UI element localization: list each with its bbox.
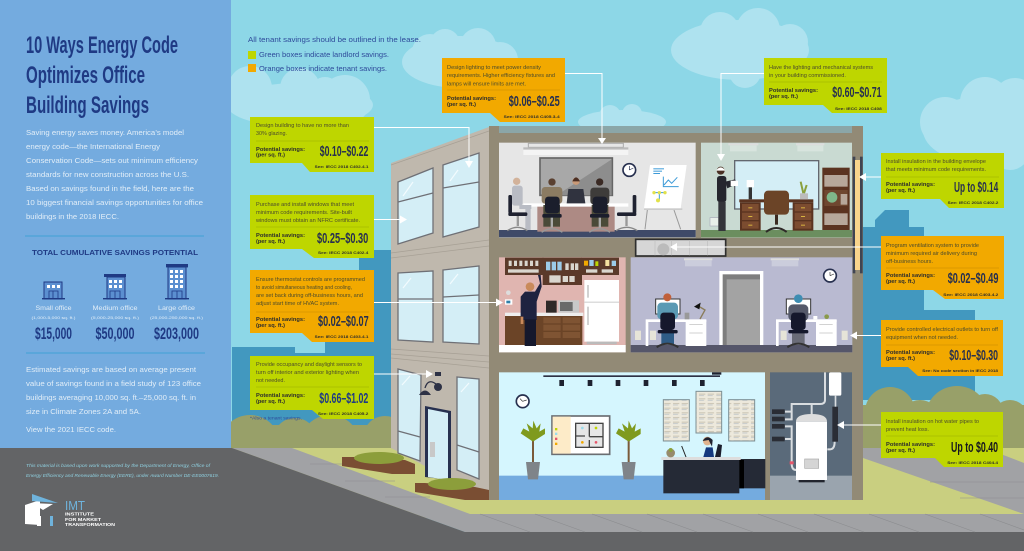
room: lobby bbox=[499, 372, 765, 500]
callout: insulation envelope bbox=[881, 153, 1004, 208]
intro text: 10 biggest financial savings opportunities for office bbox=[26, 198, 203, 207]
callout: glazing: Potential savings: bbox=[256, 147, 305, 153]
room: conference bbox=[499, 143, 696, 238]
room: kitchen bbox=[499, 257, 626, 352]
funding disclaimer: Energy Efficiency and Renewable Energy (EERE), under Award Number DE-EE0007619. bbox=[26, 473, 219, 478]
intro text: energy code—the International Energy bbox=[26, 142, 160, 151]
callout: occupancy sensors bbox=[250, 356, 374, 419]
callout: glazing: Design building to have no more than bbox=[256, 123, 349, 129]
callout: thermostat controls: See: IECC 2018 C403.4.1 bbox=[315, 334, 369, 339]
estimate note bbox=[26, 365, 201, 434]
callout: controlled outlets: Provide controlled electrical outlets to turn off bbox=[886, 327, 998, 333]
large office savings: (25,000-250,000 sq. ft.) bbox=[150, 315, 204, 320]
callout: controlled outlets: equipment when not needed. bbox=[886, 335, 958, 341]
room: mechanical bbox=[770, 372, 852, 500]
medium office savings: $50,000 bbox=[96, 324, 134, 343]
intro text: Saving energy saves money. America’s model bbox=[26, 128, 184, 137]
ventilation duct bbox=[636, 239, 726, 256]
heading: total savings: TOTAL CUMULATIVE SAVINGS POTENTIAL bbox=[32, 248, 199, 257]
ground, sidewalk and road bbox=[232, 448, 1024, 551]
large office savings: $203,000 bbox=[154, 324, 199, 343]
callout: lighting power density: lamps will ensure limits are met. bbox=[447, 82, 526, 88]
callout: lighting power density: (per sq. ft.) bbox=[447, 102, 476, 108]
legend: All tenant savings should be outlined in the lease. bbox=[248, 35, 421, 44]
callout: thermostat controls: $0.02–$0.07 bbox=[318, 313, 369, 330]
callout: commissioning: (per sq. ft.) bbox=[769, 94, 798, 100]
intro text: standards for new construction across the U.S. bbox=[26, 170, 189, 179]
callout: ventilation: Potential savings: bbox=[886, 273, 935, 279]
window glints bbox=[402, 170, 469, 422]
callout: lighting power density: Potential savings: bbox=[447, 96, 496, 102]
medium office savings: Medium office bbox=[92, 305, 138, 312]
estimate note: buildings averaging 10,000 sq. ft.–25,000 sq. ft. in bbox=[26, 393, 196, 402]
callout: lighting power density: Design lighting to meet power density bbox=[447, 65, 541, 71]
insulated wall section bbox=[853, 157, 863, 273]
callout: insulation envelope: Potential savings: bbox=[886, 182, 935, 188]
logo: IMT: TRANSFORMATION bbox=[65, 522, 116, 527]
callout: lighting power density: requirements. Higher efficiency fixtures and bbox=[447, 73, 555, 79]
callout: occupancy sensors: See: IECC 2018 C405.2 bbox=[318, 411, 369, 416]
callout: commissioning: Potential savings: bbox=[769, 88, 818, 94]
title: Building Savings bbox=[26, 92, 149, 119]
callout: ventilation: off-business hours. bbox=[886, 259, 933, 265]
icon: large office bbox=[165, 264, 189, 299]
callout: lighting power density: $0.06–$0.25 bbox=[509, 93, 560, 110]
callout: thermostat controls: Potential savings: bbox=[256, 317, 305, 323]
callout: thermostat controls bbox=[250, 270, 374, 342]
callout: insulation envelope: (per sq. ft.) bbox=[886, 188, 915, 194]
directory board bbox=[552, 416, 610, 454]
estimate note: value of savings found in a field study of 123 office bbox=[26, 379, 201, 388]
callout: glazing bbox=[250, 117, 374, 172]
large office savings: Large office bbox=[158, 305, 195, 312]
room: open office bbox=[631, 257, 852, 352]
intro text: Based on savings found in the field, here are the bbox=[26, 184, 194, 193]
person with clipboard bbox=[716, 167, 738, 231]
icon: wall lamp and sensor bbox=[419, 372, 442, 395]
callout: ventilation: See: IECC 2018 C403.4.2 bbox=[943, 292, 999, 297]
person at thermostat bbox=[521, 275, 542, 346]
legend bbox=[248, 35, 421, 73]
building: main structure bbox=[489, 126, 863, 500]
callout: glazing: 30% glazing. bbox=[256, 131, 287, 137]
callout: ventilation bbox=[881, 236, 1004, 299]
callout: controlled outlets: (per sq. ft.) bbox=[886, 356, 915, 362]
estimate note: size in Climate Zones 2A and 5A. bbox=[26, 407, 141, 416]
icon: small office bbox=[42, 282, 65, 299]
water heater bbox=[796, 414, 827, 482]
panel: left sidebar bbox=[0, 0, 232, 551]
callout: hot water pipes: prevent heat loss. bbox=[886, 427, 929, 433]
funding disclaimer bbox=[26, 463, 219, 478]
callout: occupancy sensors: not needed. bbox=[256, 378, 285, 384]
desk worker 1 bbox=[646, 293, 706, 347]
fridge bbox=[584, 280, 619, 344]
title: Optimizes Office bbox=[26, 62, 145, 89]
callout: windows: Purchase and install windows that meet bbox=[256, 202, 354, 208]
medium office savings: (5,000-25,000 sq. ft.) bbox=[91, 315, 140, 320]
callout: commissioning: in your building commissioned. bbox=[769, 73, 846, 79]
potted plants bbox=[521, 421, 641, 479]
title bbox=[26, 32, 178, 119]
callout: lighting power density bbox=[442, 58, 565, 122]
logo: IMT bbox=[25, 494, 116, 527]
bookcase bbox=[822, 168, 850, 230]
callout: windows bbox=[250, 195, 374, 258]
rooms on upper floors bbox=[499, 143, 863, 352]
wall frames bbox=[663, 391, 755, 441]
small office savings: $15,000 bbox=[35, 324, 72, 343]
clouds bbox=[227, 8, 1024, 170]
reception desk bbox=[661, 437, 765, 493]
city skyline bbox=[232, 210, 975, 428]
callout: windows: See: IECC 2018 C402.4 bbox=[318, 250, 369, 255]
callout: glazing: (per sq. ft.) bbox=[256, 152, 285, 158]
callout: glazing: See: IECC 2018 C402.4.1 bbox=[315, 164, 369, 169]
footnote: tenant savings: *Also a tenant savings. bbox=[250, 416, 302, 420]
callout: controlled outlets: See: No code section in IECC 2018 bbox=[922, 368, 999, 373]
callout: hot water pipes: (per sq. ft.) bbox=[886, 448, 915, 454]
legend: Orange boxes indicate tenant savings. bbox=[259, 64, 387, 73]
intro text bbox=[26, 128, 203, 221]
logo: IMT: INSTITUTE bbox=[65, 512, 94, 516]
callout: commissioning bbox=[764, 58, 887, 113]
callout: insulation envelope: that meets minimum code requirements. bbox=[886, 167, 986, 173]
small office savings bbox=[32, 305, 76, 343]
callout: windows: minimum code requirements. Site-built bbox=[256, 210, 352, 216]
callout: thermostat controls: to avoid simultaneous heating and cooling, bbox=[256, 285, 352, 291]
desk worker 2 bbox=[776, 294, 837, 347]
callout: thermostat controls: (per sq. ft.) bbox=[256, 323, 285, 329]
callout: occupancy sensors: $0.66–$1.02 bbox=[319, 390, 368, 407]
callout: occupancy sensors: Provide occupancy and daylight sensors to bbox=[256, 362, 362, 368]
room: private office bbox=[701, 143, 852, 238]
callout: ventilation: (per sq. ft.) bbox=[886, 279, 915, 285]
callout: controlled outlets bbox=[881, 320, 1003, 376]
callout: thermostat controls: are set back during off-business hours, and bbox=[256, 293, 363, 299]
callout: ventilation: minimum required air delivery during bbox=[886, 251, 977, 257]
estimate note: Estimated savings are based on average present bbox=[26, 365, 196, 374]
small office savings: (1,000-5,000 sq. ft.) bbox=[32, 315, 76, 320]
callout: ventilation: Program ventilation system to provide bbox=[886, 243, 979, 249]
callout: hot water pipes: See: IECC 2018 C404.4 bbox=[947, 460, 999, 465]
callout: insulation envelope: See: IECC 2018 C402.2 bbox=[948, 200, 999, 205]
desk bbox=[739, 180, 813, 232]
callout: commissioning: Have the lighting and mechanical systems bbox=[769, 65, 873, 71]
planters bbox=[342, 452, 489, 500]
people at table bbox=[507, 177, 637, 232]
callout: insulation envelope: Install insulation in the building envelope bbox=[886, 159, 986, 165]
callout: thermostat controls: Ensure thermostat controls are programmed bbox=[256, 277, 365, 283]
callout arrows bbox=[370, 74, 881, 429]
callout: windows: windows must obtain an NFRC certificate. bbox=[255, 218, 360, 224]
callout: controlled outlets: Potential savings: bbox=[886, 350, 935, 356]
title: 10 Ways Energy Code bbox=[26, 32, 178, 59]
callout: hot water pipes: Install insulation on hot water pipes to bbox=[886, 419, 979, 425]
logo: IMT: IMT bbox=[65, 498, 85, 513]
intro text: Conservation Code—sets out minimum efficiency bbox=[26, 156, 198, 165]
callout: windows: (per sq. ft.) bbox=[256, 239, 285, 245]
icon: medium office bbox=[103, 274, 127, 299]
estimate note: View the 2021 IECC code. bbox=[26, 425, 116, 434]
windows bbox=[398, 153, 479, 479]
callout: occupancy sensors: turn off interior and exterior lighting when bbox=[256, 370, 359, 376]
callout: lighting power density: See: IECC 2018 C405.3-4 bbox=[504, 114, 561, 119]
callout: thermostat controls: adjust start time of HVAC system. bbox=[256, 301, 339, 307]
callout: windows: $0.25–$0.30 bbox=[317, 230, 368, 247]
small office savings: Small office bbox=[36, 305, 72, 312]
building: left wing facade bbox=[342, 127, 489, 500]
callout: windows: Potential savings: bbox=[256, 233, 305, 239]
callout: occupancy sensors: (per sq. ft.) bbox=[256, 399, 285, 405]
callout: commissioning: $0.60–$0.71 bbox=[832, 84, 882, 101]
funding disclaimer: This material is based upon work supported by the Department of Energy, Office of bbox=[26, 463, 211, 468]
callout: commissioning: See: IECC 2018 C408 bbox=[835, 106, 883, 111]
intro text: buildings in the 2018 IECC. bbox=[26, 212, 119, 221]
logo: IMT: FOR MARKET bbox=[65, 517, 101, 522]
ground floor rooms bbox=[499, 372, 852, 500]
door bbox=[425, 406, 451, 480]
hills bbox=[220, 386, 1024, 475]
callout: hot water pipes: Potential savings: bbox=[886, 442, 935, 448]
callout: glazing: $0.10–$0.22 bbox=[320, 143, 368, 160]
callout: hot water pipes bbox=[881, 412, 1003, 467]
callout: occupancy sensors: Potential savings: bbox=[256, 393, 305, 399]
legend: Green boxes indicate landlord savings. bbox=[259, 50, 389, 59]
large office savings bbox=[150, 305, 204, 343]
medium office savings bbox=[91, 305, 140, 343]
